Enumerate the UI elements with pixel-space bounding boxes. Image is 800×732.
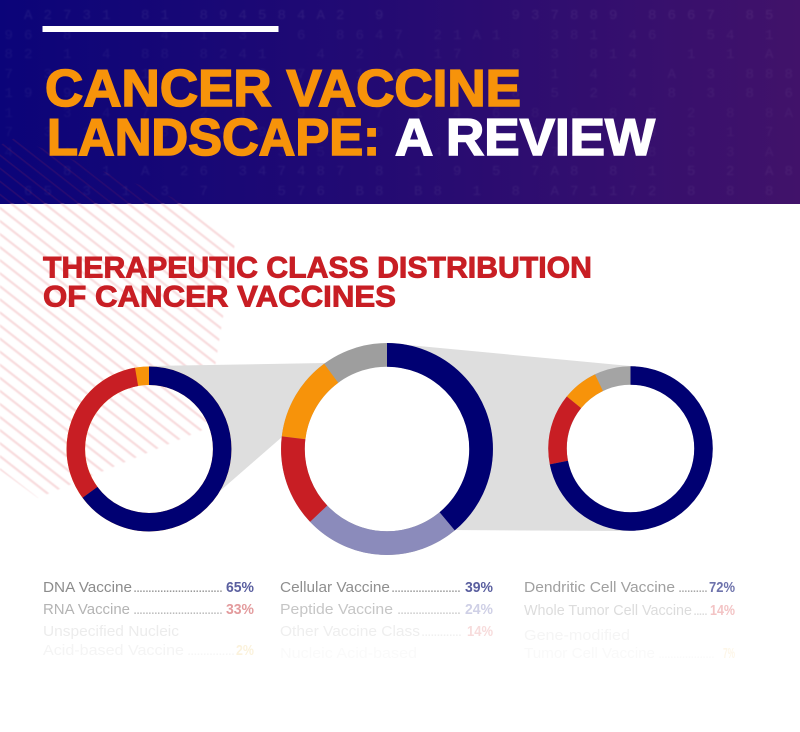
section heading: THERAPEUTIC CLASS DISTRIBUTION (43, 252, 592, 284)
legend: nucleic acid vaccines: Acid-based Vaccine (43, 642, 184, 659)
section heading: OF CANCER VACCINES (43, 280, 396, 314)
legend: cellular vaccines: ................... (658, 645, 715, 662)
header banner: 7 3 1 8 4 9 6 3 8 4 2 9 1 4 3 8 3 1 7 (4, 125, 800, 141)
header banner: 7 3 8 1 9 5 3 7 1 6 2 3 1 4 4 A 3 888 (4, 67, 800, 83)
header banner: 1 3 4 7 2 1 9 6 7 1 4 6 8 6 8 5 2 8 8A (4, 106, 800, 122)
legend: therapeutic classes: ....................... (391, 579, 461, 596)
title (45, 60, 656, 167)
connector: main chart to cellular breakdown (387, 343, 630, 531)
header banner (0, 0, 800, 204)
legend: cellular vaccines: 7% (723, 646, 735, 662)
legend: therapeutic classes: Cellular Vaccine (280, 579, 390, 596)
donut chart: therapeutic classes (293, 355, 481, 543)
legend: therapeutic classes: ..................... (397, 601, 461, 618)
legend: nucleic acid vaccines: Unspecified Nucleic (43, 623, 180, 640)
legend: cellular vaccines: Gene-modified (524, 627, 630, 644)
striped background shape (0, 204, 235, 498)
legend: cellular vaccines: ..... (693, 602, 708, 619)
legend: therapeutic classes: 24% (465, 602, 493, 618)
legend: nucleic acid vaccines (43, 579, 254, 659)
legend: nucleic acid vaccines: ............... (187, 642, 235, 659)
legend: therapeutic classes: 39% (465, 580, 493, 596)
donut chart: nucleic acid vaccines (76, 376, 222, 522)
legend: therapeutic classes (280, 579, 493, 662)
legend: therapeutic classes: Nucleic Acid-based (280, 645, 417, 662)
title: LANDSCAPE: (47, 109, 380, 167)
legend: nucleic acid vaccines: DNA Vaccine (43, 579, 132, 596)
legend: therapeutic classes: ............. (421, 623, 462, 640)
legend: nucleic acid vaccines: .............................. (133, 579, 223, 596)
decorative white bar (42, 26, 278, 32)
connector: nucleic acid breakdown to main chart (149, 363, 325, 491)
header banner: 8 1 A 26 347487 8 1 9 5 7A8 8 1 5 2 A8 (4, 164, 800, 180)
legend: cellular vaccines: Dendritic Cell Vaccine (524, 579, 675, 596)
header banner: 82 1 4 88 8241 4 2 A 17 8 3 814 1 1 A (4, 47, 800, 63)
legend: cellular vaccines: 14% (710, 603, 735, 619)
header banner: 4 1 8 3 1 7 3 5 8 2 4 6 9 7 3 8 6 3 A (4, 145, 800, 161)
legend: cellular vaccines (524, 579, 735, 662)
legend: therapeutic classes: Peptide Vaccine (280, 601, 393, 618)
header banner: 96 8 4 1 3 6 8647 21A1 381 46 54 1 (4, 28, 800, 44)
legend: nucleic acid vaccines: RNA Vaccine (43, 601, 130, 618)
section heading (43, 252, 592, 314)
legend: cellular vaccines: Whole Tumor Cell Vaccine (524, 602, 692, 619)
header banner: 65 3 1 3 7 576 B8 B8 1 8 A71172 8 8 8 (4, 184, 800, 200)
legend: nucleic acid vaccines: 65% (226, 580, 254, 596)
header banner: A2731 81 894584A2 9 937889 8667 85 7 (4, 8, 800, 24)
legend: nucleic acid vaccines: 2% (236, 643, 254, 659)
title: A REVIEW (395, 109, 656, 167)
legend: therapeutic classes: Other Vaccine Class (280, 623, 420, 640)
donut chart: cellular vaccines (558, 376, 704, 522)
legend: cellular vaccines: Tumor Cell Vaccine (524, 645, 655, 662)
title: CANCER VACCINE (45, 60, 521, 118)
header banner: 19 9 3 4 1 8 6 3 8 3 8 8 5 2 4 8 3 8 6 (4, 86, 800, 102)
legend: cellular vaccines: .......... (678, 579, 708, 596)
legend: therapeutic classes: 14% (467, 624, 493, 640)
legend: cellular vaccines: 72% (709, 580, 735, 596)
legend: nucleic acid vaccines: .............................. (133, 601, 223, 618)
legend: nucleic acid vaccines: 33% (226, 602, 254, 618)
